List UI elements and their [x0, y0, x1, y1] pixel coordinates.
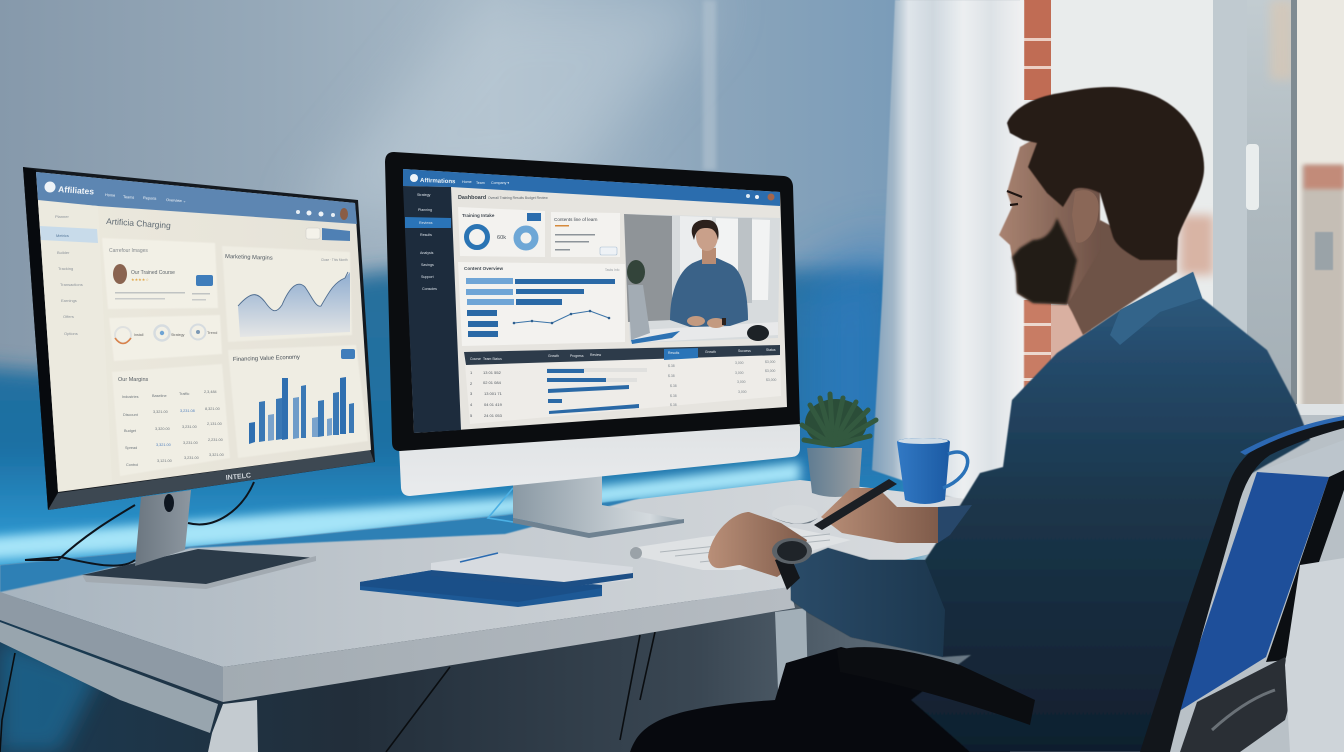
- panel: data table: Course: [470, 357, 481, 361]
- sidebar: Strategy: [417, 193, 431, 197]
- stand: [488, 474, 684, 538]
- panel: bar chart: [228, 345, 368, 458]
- panel: profile card: [102, 238, 218, 309]
- panel: table: 8,321.00: [205, 407, 220, 411]
- panel: data table: Growth: [548, 354, 559, 358]
- collar: [1110, 272, 1202, 345]
- bezel: [385, 152, 800, 451]
- panel: data table: $.38: [670, 394, 677, 398]
- left screen: [36, 172, 371, 492]
- panel: data table: 4: [470, 402, 473, 407]
- panel: data table: Review: [590, 353, 602, 357]
- panel: video of woman presenter: [624, 214, 780, 344]
- sidebar: Transactions: [60, 282, 83, 287]
- sidebar: Reviews: [419, 221, 433, 225]
- nav bar: Home: [462, 180, 472, 184]
- left hand: [708, 512, 807, 577]
- panel: donut cards: Training Intake: [462, 213, 495, 218]
- left screen nav bar: [36, 172, 357, 224]
- panel: area chart: Close · This Month: [321, 258, 348, 262]
- radiator: [1285, 558, 1344, 752]
- panel: data table: 02 01 084: [483, 380, 502, 385]
- armrest: [837, 647, 1035, 725]
- rear arm cuff: [938, 505, 972, 543]
- face: [999, 130, 1100, 305]
- notebooks: [360, 553, 633, 607]
- panel: contents card: [551, 212, 620, 257]
- panel: data table: $3,000: [766, 378, 776, 382]
- panel: table: 3,231.00: [182, 425, 197, 429]
- presenter: [670, 220, 748, 328]
- panel: data table: Success: [738, 349, 751, 353]
- sidebar: [403, 186, 461, 433]
- panel: table: 2,231.00: [208, 438, 223, 442]
- panel: data table: 2: [470, 381, 473, 386]
- panel: table: [112, 364, 230, 476]
- panel: data table: $3,000: [765, 360, 775, 364]
- window with brick wall and frame: [1020, 0, 1344, 752]
- beard: [1012, 218, 1077, 304]
- monitor bezel: [23, 167, 375, 510]
- sidebar: Builder: [57, 250, 70, 255]
- panel: contents card: Contents line of learn: [554, 217, 598, 222]
- trousers: [630, 647, 1010, 752]
- heading: training tabs: [458, 195, 548, 201]
- left screen nav bar: Overview ⌄: [166, 198, 186, 203]
- chair: [837, 416, 1344, 752]
- panel: table: 2,3,484: [204, 390, 217, 394]
- panel: table: 3,321.00: [209, 453, 224, 457]
- ear: [1072, 190, 1099, 243]
- wristwatch: [772, 538, 812, 590]
- sidebar: Results: [420, 233, 432, 237]
- button row: [306, 228, 350, 241]
- panel: table: 3,320.00: [155, 427, 170, 431]
- panel: data table: 04 01 419: [484, 402, 503, 407]
- panel: data table: $.38: [668, 364, 675, 368]
- panel: table: Industries: [122, 395, 139, 399]
- heading: dashboard title: Artificia Charging: [106, 216, 171, 231]
- panel: area chart: Marketing Margins: [225, 254, 273, 262]
- curtain: [872, 0, 1024, 500]
- forearm sleeve: [791, 548, 945, 657]
- panel: table: 2,131.00: [207, 422, 222, 426]
- sidebar: Analysis: [420, 251, 434, 255]
- sidebar: Planner: [55, 214, 69, 219]
- mouse: [772, 505, 818, 524]
- sidebar: Planning: [418, 208, 432, 212]
- lumbar mechanism: [1180, 657, 1290, 752]
- panel: profile card: ★★★★☆: [131, 277, 149, 282]
- left screen nav bar: Teams: [123, 195, 134, 200]
- right hand: [821, 488, 938, 543]
- panel: data table: 24 01 053: [484, 413, 503, 418]
- left screen nav bar: Reports: [143, 196, 157, 201]
- sidebar: Earnings: [61, 298, 77, 303]
- panel: data table: $3,000: [765, 369, 775, 373]
- right screen: [403, 169, 787, 433]
- panel: table: Baseline: [152, 394, 167, 398]
- heading: training tabs: Dashboard: [458, 195, 486, 201]
- left screen nav bar: Affiliates: [58, 184, 95, 197]
- panel: data table: 3,000: [737, 380, 746, 384]
- left screen nav bar: Home: [105, 193, 115, 198]
- panel: table: 3,231.08: [180, 409, 195, 413]
- coffee mug: [897, 438, 968, 504]
- wall background: [0, 0, 920, 600]
- panel: table: Traffic: [179, 392, 189, 396]
- pen: [814, 479, 897, 530]
- panel: table: Our Margins: [118, 377, 149, 383]
- sidebar: [38, 201, 112, 491]
- panel: profile card: Carrefour Images: [109, 248, 148, 254]
- panel: data table: $.38: [670, 384, 677, 388]
- sidebar: Support: [421, 275, 434, 279]
- panel: data table: Team Status: [483, 357, 502, 361]
- panel: data table: Growth: [705, 350, 716, 354]
- panel: donut cards: 60k: [497, 235, 506, 241]
- sidebar: Metrics: [56, 233, 69, 238]
- panel: bar chart: Financing Value Economy: [233, 355, 300, 363]
- chin: [399, 420, 800, 496]
- sidebar: Tracking: [58, 266, 73, 271]
- panel: table: 3,321.00: [156, 443, 171, 447]
- panel: table: 3,231.00: [184, 456, 199, 460]
- panel: horizontal bars and line chart: Content Overview: [464, 266, 503, 271]
- nav bar: Company ▾: [491, 181, 509, 185]
- panel: table: 3,321.00: [153, 410, 168, 414]
- sidebar: Options: [64, 331, 78, 336]
- sidebar: Offers: [63, 314, 74, 319]
- panel: data table: $.38: [670, 403, 677, 407]
- heading: training tabs: Overall Training Results Budget Review: [488, 196, 548, 200]
- nav bar: Affirmations: [420, 178, 456, 185]
- eye and brow: [1007, 191, 1022, 205]
- panel: data table: 13 001 71: [484, 391, 503, 396]
- panel: data table: 5: [470, 413, 473, 418]
- panel: data table: 3,000: [735, 371, 744, 375]
- panel: metrics rings: Install: [134, 333, 144, 337]
- neck: [1067, 220, 1177, 335]
- man working: [630, 87, 1344, 752]
- hair: [1007, 87, 1204, 260]
- under-desk area: [0, 600, 1000, 752]
- keyboard: [630, 527, 851, 570]
- panel: data table: $.38: [668, 374, 675, 378]
- panel: data table: Progress: [570, 354, 584, 358]
- panel: horizontal bars and line chart: Tasks Info: [605, 268, 620, 272]
- nav bar: [403, 169, 780, 206]
- panel: area chart: [222, 246, 352, 342]
- panel: table: Control: [126, 463, 138, 467]
- sidebar: Savings: [421, 263, 434, 267]
- panel: metrics rings: [109, 315, 222, 361]
- panel: data table: Status: [766, 348, 776, 352]
- nav bar: Team: [476, 181, 485, 185]
- plant in pot: [802, 394, 876, 497]
- denim shirt torso and arm: [791, 272, 1310, 752]
- panel: profile card: Our Trained Course: [131, 270, 175, 276]
- sidebar: Consoles: [422, 287, 437, 291]
- desk: [0, 480, 975, 752]
- monitor stand: [25, 482, 316, 589]
- panel: data table: 1: [470, 370, 473, 375]
- panel: metrics rings: Trend: [207, 330, 217, 335]
- panel: horizontal bars and line chart: [458, 262, 625, 346]
- panel: table: Spread: [125, 446, 137, 450]
- monitor brand label: INTELC: [225, 472, 251, 482]
- panel: data table: Results: [668, 351, 680, 355]
- left monitor: [23, 167, 375, 589]
- panel: table: Budget: [124, 429, 137, 433]
- panel: metrics rings: Strategy: [171, 333, 185, 337]
- panel: data table: [464, 345, 781, 424]
- panel: table: Discount: [123, 413, 139, 417]
- panel: table: 3,231.00: [183, 441, 198, 445]
- panel: donut cards: [458, 207, 545, 257]
- panel: data table: 13 01 552: [483, 370, 502, 375]
- panel: data table: 3: [470, 391, 473, 396]
- right monitor: [385, 152, 800, 538]
- panel: data table: 3,000: [735, 361, 744, 365]
- panel: data table: 3,000: [738, 390, 747, 394]
- panel: table: 3,121.00: [157, 459, 172, 463]
